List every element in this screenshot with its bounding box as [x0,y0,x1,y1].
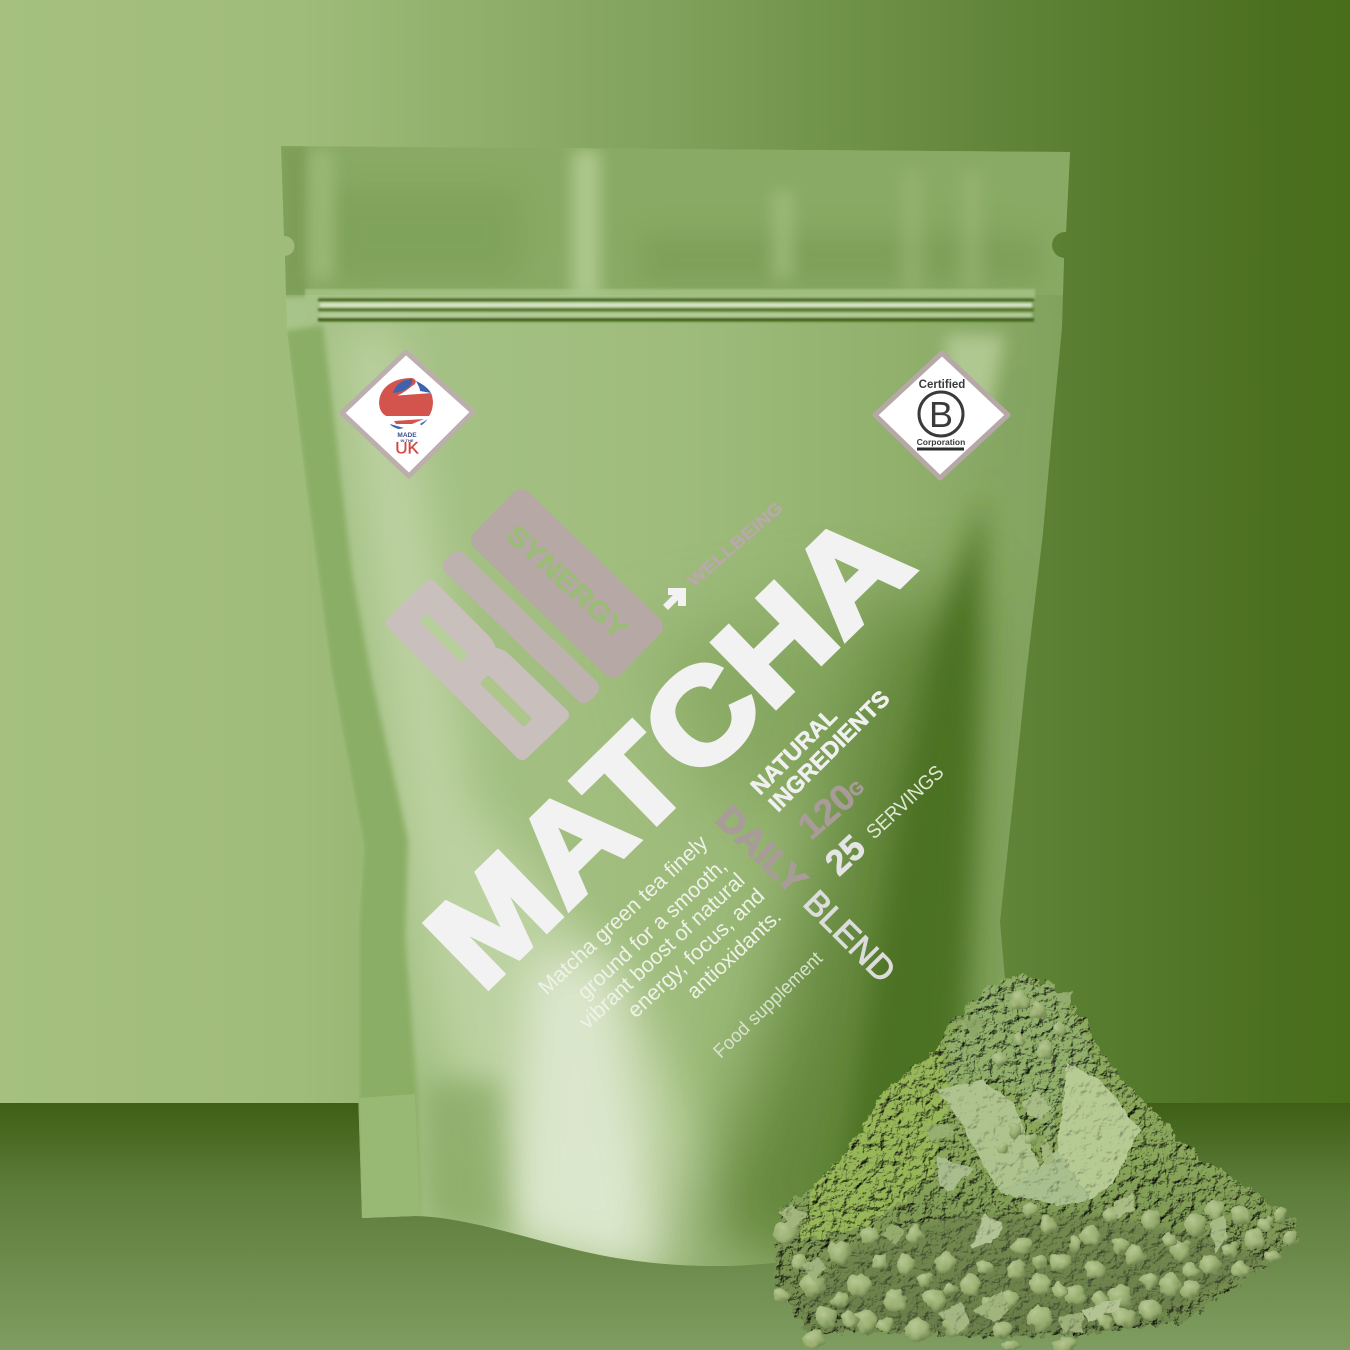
weight: 120 [789,775,863,847]
lit left flank [800,1047,950,1240]
badge: Certified B Corporation: B [929,394,953,435]
title: MATCHA: MATCHA [399,484,937,1014]
icon: union flag globe [379,376,433,430]
description: Matcha green tea finely [534,830,713,999]
servings: SERVINGS [862,761,948,844]
badge: Certified B Corporation [875,353,1008,478]
badge: Certified B Corporation: Certified [919,379,965,391]
zip seal [305,289,1035,322]
pressed block faces [937,1063,1140,1205]
description [534,830,786,1034]
large chunks [779,990,1228,1335]
pouch [270,140,1080,1280]
daily blend: BLEND [796,883,903,990]
daily blend: DAILY [709,797,815,902]
matcha powder pile [774,975,1297,1350]
food supplement note: Food supplement [710,948,828,1063]
crown [945,978,1098,1145]
description: vibrant boost of natural [574,868,750,1034]
badge: Made in the UK [342,352,473,476]
logo wordmark: SYNERGY [500,519,634,645]
pouch shading [270,140,1080,1270]
wellbeing label: WELLBEING [684,498,786,591]
logo: BI Synergy [393,485,667,753]
badge: Made in the UK: UK [395,438,419,458]
natural ingredients: INGREDIENTS [763,685,895,817]
description: energy, focus, and [623,884,769,1022]
natural ingredients: NATURAL [745,703,842,800]
description: ground for a smooth, [573,854,731,1004]
granule shadow [800,1215,1270,1330]
badge: Made in the UK: IN THE [400,438,414,443]
weight: G [845,777,868,801]
arrow icon [663,588,686,610]
description: antioxidants. [682,904,786,1004]
floor [0,1103,1350,1350]
pile body [774,975,1297,1337]
badge: Made in the UK: MADE [397,432,417,439]
servings [818,761,948,883]
badge: Certified B Corporation: Corporation [917,437,965,447]
daily blend [709,797,903,990]
servings: 25 [818,828,873,883]
granules [774,991,1297,1350]
